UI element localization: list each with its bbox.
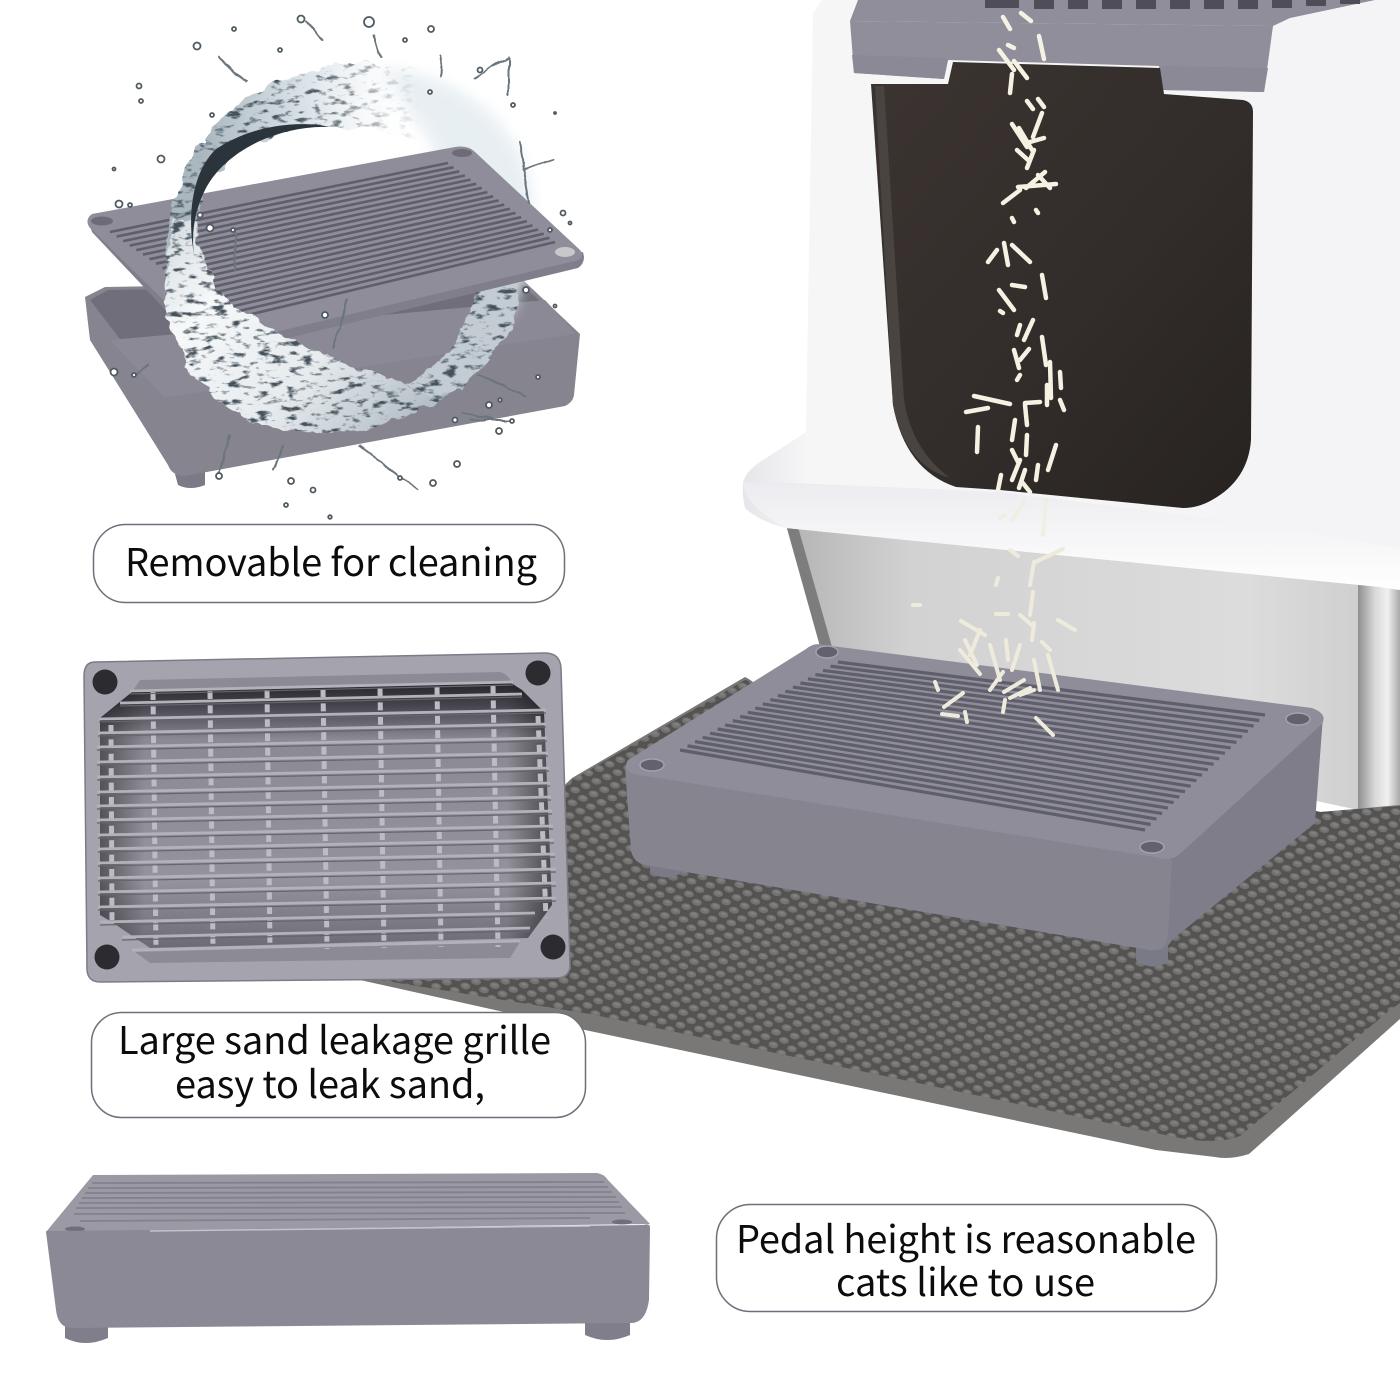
tray top surface: [626, 644, 1324, 859]
grille screw holes: [92, 660, 566, 970]
step tray main view: [625, 644, 1324, 967]
white housing: [743, 0, 1400, 590]
tray front and side faces: [625, 716, 1323, 950]
cross ribs: [111, 686, 546, 950]
raised bars: [132, 672, 520, 963]
grille label: easy to leak sand,: [175, 1054, 485, 1109]
water droplets: [110, 16, 572, 519]
side view feet: [65, 1320, 630, 1343]
door reflection: [875, 86, 950, 478]
dark door flap: [871, 62, 1253, 508]
grille label: [92, 1010, 586, 1118]
water ring front: [110, 16, 572, 519]
tray feet: [650, 855, 1168, 967]
lid ribs: [110, 163, 555, 318]
water rinse panel: [85, 16, 584, 519]
side view tray: [46, 1173, 650, 1343]
pedal height label: cats like to use: [836, 1252, 1095, 1307]
horizontal slats: [97, 682, 556, 950]
slat shadows: [97, 685, 556, 940]
lid holes: [91, 149, 575, 257]
grille opening: [100, 681, 552, 948]
litter below the ledge and pile: [913, 500, 1075, 735]
removable tray base: [85, 280, 580, 488]
steel drawer: [786, 525, 1400, 812]
side view top: [46, 1173, 650, 1232]
inner dark reflection: [191, 124, 330, 260]
tray corner holes: [640, 646, 1310, 853]
water tendrils: [134, 22, 553, 490]
side view ribs: [74, 1182, 625, 1221]
removable label: Removable for cleaning: [125, 532, 537, 587]
water ring back: [380, 70, 532, 400]
litter box: [743, 0, 1400, 812]
removable label: [94, 524, 564, 602]
removable tray lid: [87, 147, 584, 356]
grille underside panel: [84, 653, 570, 982]
eva litter mat: [360, 677, 1400, 1158]
side view holes: [65, 1220, 632, 1232]
tray ribs: [680, 662, 1265, 830]
grille frame: [84, 653, 570, 982]
grille label: Large sand leakage grille: [118, 1010, 551, 1065]
pedal height label: [716, 1204, 1216, 1312]
falling litter pellets: [966, 13, 1064, 492]
pedal height label: Pedal height is reasonable: [736, 1209, 1196, 1264]
side view front: [46, 1224, 650, 1328]
grey top lid: [850, 0, 1375, 92]
